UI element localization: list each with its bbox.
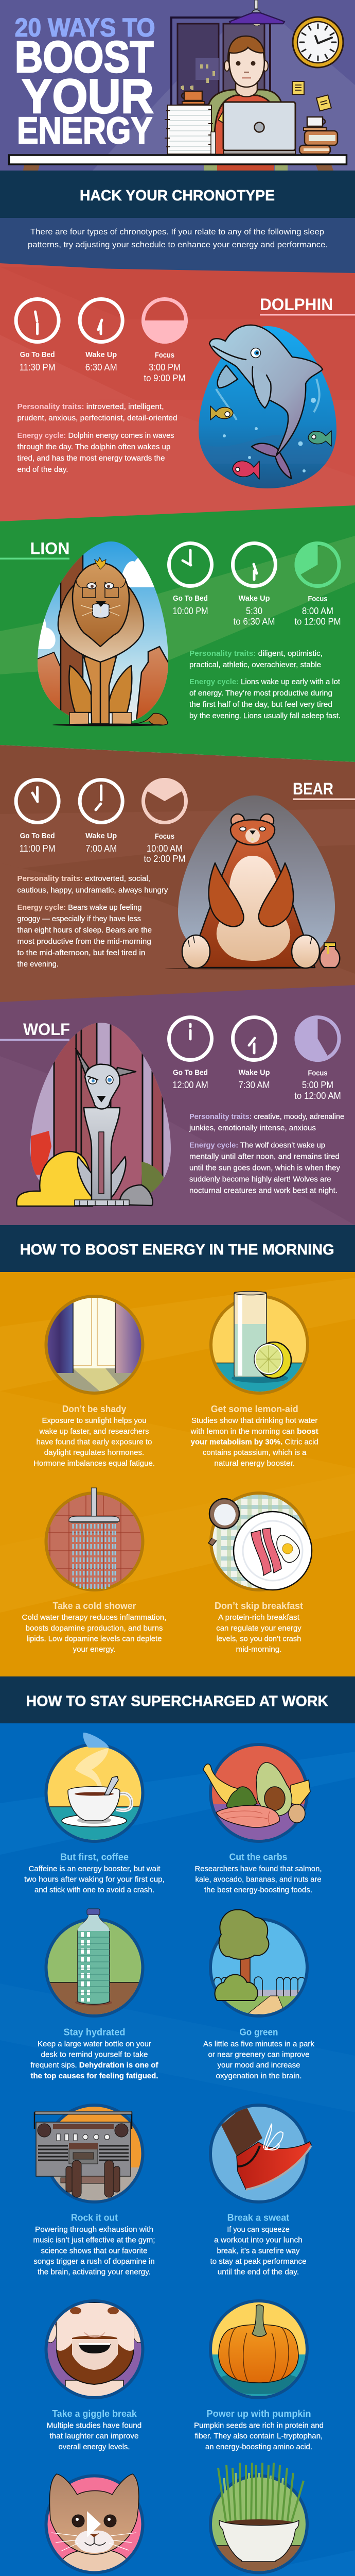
clock: go to bed: Go To Bed	[20, 351, 55, 359]
tip: stay hydrated: frequent sips. Dehydration is one of	[31, 2061, 158, 2070]
clock: wolf go to bed: Go To Bed	[173, 1069, 208, 1077]
dolphin traits text: end of the day.	[17, 465, 68, 474]
section band: hack your chronotype: HACK YOUR CHRONOTYPE	[80, 188, 275, 204]
chronotype intro: patterns, try adjusting your schedule to enhance your energy and performance.	[28, 241, 328, 249]
tip: stay hydrated: desk to remind yourself to take	[41, 2050, 148, 2059]
bear traits text: Personality traits: extroverted, social,	[17, 874, 150, 883]
honey pot	[320, 943, 340, 968]
icon: pumpkin	[209, 2299, 309, 2401]
lion traits text: by the evening. Lions usually fall asleep fast.	[189, 711, 341, 720]
bear traits text: most productive from the mid-morning	[17, 937, 151, 946]
icon: laughing face	[44, 2299, 144, 2399]
bear traits text	[17, 874, 168, 969]
tip: breakfast: levels, so you don’t crash	[217, 1635, 301, 1643]
bear head	[230, 814, 275, 845]
heading: lion: LION	[30, 539, 70, 557]
tip: cut the carbs: Cut the carbs	[229, 1852, 287, 1862]
tip: rock it out: Powering through exhaustion with	[35, 2226, 153, 2234]
heading: dolphin: DOLPHIN	[260, 295, 333, 314]
clock: lion focus	[294, 541, 341, 626]
panel: morning tips background	[0, 1272, 355, 1676]
tip: rock it out: songs trigger a rush of dopamine in	[33, 2258, 155, 2266]
clock: bear wake up: 7:00 AM	[85, 843, 117, 854]
clock: lion focus: 8:00 AM	[302, 606, 333, 616]
tip: cut the carbs: the best energy-boosting foods.	[204, 1886, 312, 1894]
tip: don't be shady: Don’t be shady	[62, 1404, 126, 1414]
wolf traits text: Energy cycle: The wolf doesn’t wake up	[189, 1141, 325, 1150]
clock: wolf focus: 5:00 PM	[302, 1080, 333, 1090]
bear traits text: groggy — especially if they have less	[17, 914, 141, 923]
clock: lion wake up: Wake Up	[239, 595, 270, 603]
tip: breakfast: Don’t skip breakfast	[215, 1601, 303, 1611]
lion traits text	[189, 649, 341, 720]
hero illustration: man at desk	[9, 0, 347, 171]
tip: pumpkin: an energy-boosting amino acid.	[205, 2443, 312, 2451]
clock: wolf wake up: Wake Up	[239, 1069, 270, 1077]
tip: go green: or near greenery can improve	[208, 2050, 310, 2059]
clock: focus: to 9:00 PM	[144, 373, 185, 383]
tip: cold shower	[22, 1488, 167, 1654]
tip: go green: your mood and increase	[217, 2061, 300, 2070]
bear traits text: cautious, happy, undramatic, always hungry	[17, 886, 168, 895]
clock: wolf go to bed	[169, 1017, 212, 1090]
clock: wake up	[80, 299, 122, 372]
desk legs	[23, 165, 333, 171]
tip: pumpkin: Power up with pumpkin	[207, 2409, 311, 2419]
tip: go green: oxygenation in the brain.	[216, 2072, 301, 2080]
tip: pumpkin: fiber. They also contain L-tryptophan,	[195, 2432, 323, 2441]
desk top	[9, 155, 347, 164]
tip: cold shower: Cold water therapy reduces inflammation,	[22, 1614, 167, 1622]
clock: focus: Focus	[155, 351, 174, 360]
tip: rock it out: Rock it out	[71, 2213, 118, 2223]
clock: bear go to bed: 11:00 PM	[20, 843, 56, 854]
heading: wolf	[0, 1020, 70, 1041]
illustration: dolphin	[199, 325, 336, 488]
icon: shower head	[44, 1488, 144, 1592]
clock: lion wake up	[233, 543, 276, 626]
tip: cut the carbs: kale, avocado, bananas, and nuts are	[196, 1875, 321, 1884]
tip: rock it out	[33, 2104, 155, 2277]
tip: break a sweat	[209, 2104, 311, 2277]
tip: break a sweat: If you can squeeze	[227, 2226, 290, 2234]
icon: glass and lemon	[209, 1291, 309, 1399]
title: ENERGY	[17, 110, 152, 151]
clock: go to bed: 11:30 PM	[20, 362, 56, 372]
clock: bear focus: Focus	[155, 833, 174, 841]
section band: hack your chronotype	[0, 171, 355, 218]
clock: bear go to bed: Go To Bed	[20, 832, 55, 840]
clock: wolf wake up: 7:30 AM	[239, 1080, 270, 1090]
tip: break a sweat: to stay at peak performance	[210, 2258, 307, 2266]
tip: don't be shady: daylight regulates hormones.	[44, 1449, 144, 1457]
clock: bear focus	[143, 778, 186, 864]
tip: breakfast: mid-morning.	[236, 1646, 282, 1654]
wolf traits text: junkies, emotionally intense, anxious	[189, 1124, 316, 1132]
tip: coffee: and stick with one to avoid a crash.	[34, 1886, 154, 1894]
wolf traits text: nocturnal creatures and work best at night.	[189, 1187, 338, 1195]
tip: don't be shady: have found that early exposure to	[36, 1438, 152, 1447]
bear traits text: to the mid-afternoon, but feel tired in	[17, 948, 145, 957]
bear traits text: the evening.	[17, 960, 59, 969]
illustration: wolf	[16, 1023, 171, 1208]
clock: wolf wake up	[233, 1017, 276, 1090]
lion traits text: Personality traits: diligent, optimistic,	[189, 649, 323, 658]
tip: cold shower: lipids. Low dopamine levels can deplete	[27, 1635, 162, 1643]
tip: don't be shady	[33, 1293, 155, 1468]
clock: lion focus: to 12:00 PM	[294, 616, 341, 626]
tip: breakfast	[208, 1492, 312, 1654]
tip: rock it out: music isn’t just effective at the gym;	[33, 2236, 155, 2245]
clock: bear go to bed	[16, 780, 59, 854]
tip: coffee: Caffeine is an energy booster, but wait	[29, 1865, 161, 1873]
icon: coffee cup	[44, 1733, 144, 1843]
section band: work	[0, 1676, 355, 1723]
dolphin traits text: prudent, anxious, perfectionist, detail-oriented	[17, 414, 177, 422]
dolphin traits text: Personality traits: introverted, intelligent,	[17, 402, 164, 411]
panel: dolphin	[0, 263, 355, 523]
heading: wolf: WOLF	[23, 1020, 70, 1039]
wolf traits text: until the sun goes down, which is when they	[189, 1164, 340, 1173]
tip: cut the carbs: Researchers have found that salmon,	[194, 1865, 322, 1873]
tip: cute animal videos	[44, 2473, 144, 2574]
tip: cold shower: Take a cold shower	[52, 1601, 136, 1611]
tip: rock it out: the brain, activating your energy.	[38, 2268, 151, 2277]
heading: bear: BEAR	[293, 779, 333, 798]
bear traits text: than eight hours of sleep. Bears are the	[17, 926, 152, 935]
tip: go green	[203, 1910, 315, 2080]
tip: pumpkin	[194, 2299, 324, 2451]
icon: boombox and dumbbell	[34, 2104, 144, 2204]
panel: wolf	[0, 985, 355, 1225]
section band: morning: HOW TO BOOST ENERGY IN THE MORNING	[20, 1242, 334, 1258]
icon: park	[209, 1910, 309, 2018]
bear traits text: Energy cycle: Bears wake up feeling	[17, 903, 142, 912]
coffee cup on stack	[182, 86, 205, 104]
tip: giggle break: overall energy levels.	[59, 2443, 130, 2451]
fish	[210, 406, 331, 479]
icon: healthy food	[203, 1743, 310, 1845]
tip: breakfast: can regulate your energy	[216, 1624, 302, 1633]
tip: lemon-aid: contains potassium, which is a	[203, 1449, 307, 1457]
tip: lemon-aid	[190, 1291, 318, 1468]
heading: bear	[293, 779, 355, 800]
tip: lemon-aid: Get some lemon-aid	[211, 1404, 298, 1414]
tip: coffee	[24, 1733, 165, 1894]
icon: window curtains	[44, 1293, 144, 1396]
books and white cup	[299, 117, 338, 154]
tip: go green: As little as five minutes in a park	[203, 2040, 315, 2048]
tip: pumpkin: Pumpkin seeds are rich in protein and	[194, 2422, 324, 2430]
tip: don't be shady: Hormone imbalances equal fatigue.	[33, 1460, 155, 1468]
clock: bear focus: 10:00 AM	[147, 843, 183, 854]
lamp light beam	[93, 23, 355, 171]
tip: breakfast: A protein-rich breakfast	[218, 1614, 299, 1622]
tip: cold shower: your energy.	[73, 1646, 115, 1654]
tip: break a sweat: Break a sweat	[227, 2213, 289, 2223]
clock: go to bed	[16, 299, 59, 372]
tip: giggle break	[44, 2299, 145, 2451]
clock: wolf focus: to 12:00 AM	[294, 1091, 341, 1101]
wolf traits text: Personality traits: creative, moody, adrenaline	[189, 1112, 344, 1121]
wall clock	[293, 17, 343, 67]
icon: sneaker	[209, 2104, 311, 2204]
clock: wake up: 6:30 AM	[85, 362, 117, 372]
tip: stay hydrated: Keep a large water bottle on your	[38, 2040, 151, 2048]
tip: giggle break: Multiple studies have found	[47, 2422, 141, 2430]
tip: stay hydrated: the top causes for feeling fatigued.	[31, 2072, 158, 2080]
chair	[208, 90, 282, 155]
clock: focus	[141, 299, 188, 383]
dolphin traits text: tired, and has the most energy towards the	[17, 454, 165, 463]
illustration: bear	[165, 795, 340, 970]
lion traits text: practical, athletic, overachiever, stable	[189, 660, 321, 669]
tip: break a sweat: a workout into your lunch	[214, 2236, 303, 2245]
tip: giggle break: that laughter can improve	[49, 2432, 139, 2441]
panel: work tips background	[0, 1723, 355, 2576]
man	[214, 36, 281, 155]
title: BOOST	[15, 32, 154, 82]
section band: morning	[0, 1225, 355, 1272]
tip: don't be shady: wake up faster, and researchers	[39, 1428, 149, 1436]
panel: bear	[0, 745, 355, 1005]
clock: bear focus: to 2:00 PM	[144, 854, 185, 864]
section band: work: HOW TO STAY SUPERCHARGED AT WORK	[26, 1693, 328, 1710]
chronotype intro	[0, 218, 355, 285]
icon: bacon and eggs	[208, 1492, 312, 1592]
tip: lemon-aid: with lemon in the morning can boost	[190, 1428, 318, 1436]
tip: break a sweat: break, it’s a surefire way	[217, 2247, 300, 2255]
lion traits text: Energy cycle: Lions wake up early with a lot	[189, 677, 341, 686]
panel: lion	[0, 505, 355, 762]
tip: stay hydrated: Stay hydrated	[64, 2027, 126, 2037]
chronotype intro: There are four types of chronotypes. If you relate to any of the following sleep	[30, 228, 324, 236]
dolphin traits text: Energy cycle: Dolphin energy comes in waves	[17, 431, 174, 440]
tip: break a sweat: until the end of the day.	[218, 2268, 299, 2277]
title	[15, 13, 155, 151]
laptop	[223, 102, 295, 154]
illustration: lion	[38, 541, 168, 726]
clock: focus: 3:00 PM	[149, 362, 181, 372]
tip: go green: Go green	[240, 2027, 278, 2037]
wolf traits text: suddenly become highly alert! Wolves are	[189, 1175, 331, 1184]
tip: cold shower: boosts dopamine production, and burns	[26, 1624, 163, 1633]
clock: wake up: Wake Up	[85, 351, 117, 359]
window	[171, 18, 271, 105]
icon: water bottle	[44, 1909, 144, 2024]
icon: wheatgrass pot	[209, 2463, 309, 2576]
wolf traits text	[189, 1112, 344, 1195]
tip: lemon-aid: Studies show that drinking hot water	[191, 1417, 318, 1425]
tip: coffee: But first, coffee	[60, 1852, 129, 1862]
tip: giggle break: Take a giggle break	[52, 2409, 137, 2419]
lion traits text: the first half of the day, but feel very tired	[189, 700, 332, 709]
tip: lemon-aid: your metabolism by 30%. Citric acid	[191, 1438, 318, 1447]
title: YOUR	[22, 69, 154, 123]
clock: bear wake up: Wake Up	[85, 832, 117, 840]
clock: wolf go to bed: 12:00 AM	[172, 1080, 208, 1090]
hero background	[0, 0, 355, 171]
tip: chug a shot	[209, 2463, 309, 2574]
icon: cat with play button	[44, 2474, 144, 2576]
paper stack	[165, 105, 216, 154]
tip: cut the carbs	[194, 1743, 322, 1894]
clock: lion go to bed	[169, 543, 212, 616]
clock: wolf focus	[294, 1015, 341, 1101]
tip: coffee: two hours after waking for your first cup,	[24, 1875, 165, 1884]
lamp	[229, 0, 285, 26]
clock: bear wake up	[80, 780, 122, 854]
lion traits text: of energy. They’re most productive during	[189, 689, 332, 698]
tip: rock it out: science shows that our favorite	[41, 2247, 147, 2255]
dolphin traits text: through the day. The dolphin often wakes up	[17, 443, 171, 451]
clock: lion focus: Focus	[308, 595, 327, 603]
sticky note on shirt	[218, 108, 235, 126]
sticky notes	[292, 81, 331, 111]
clock: lion wake up: 5:30	[246, 606, 262, 616]
dolphin traits text	[17, 402, 177, 474]
clock: lion go to bed: Go To Bed	[173, 595, 208, 603]
tip: don't be shady: Exposure to sunlight helps you	[42, 1417, 146, 1425]
clock: lion go to bed: 10:00 PM	[173, 606, 208, 616]
heading: lion	[0, 539, 70, 560]
tip: lemon-aid: natural energy booster.	[214, 1460, 295, 1468]
wolf traits text: mentally until after noon, and remains tired	[189, 1152, 340, 1161]
title: 20 WAYS TO	[15, 13, 155, 42]
tip: stay hydrated	[31, 1909, 158, 2080]
lion body	[52, 557, 168, 726]
clock: wolf focus: Focus	[308, 1070, 327, 1078]
clock: lion wake up: to 6:30 AM	[234, 616, 275, 626]
